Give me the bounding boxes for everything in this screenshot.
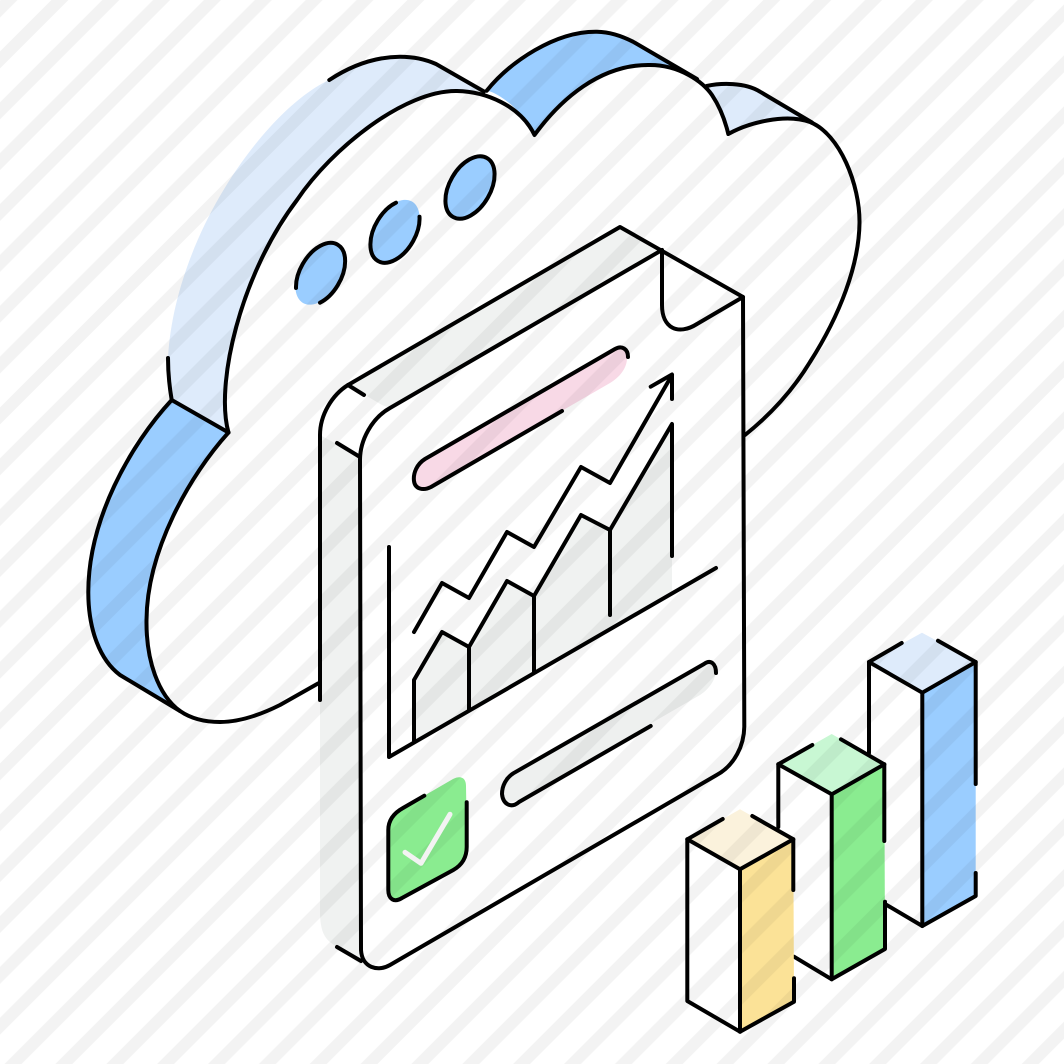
icon: green checkbox <box>388 777 467 900</box>
bar: green <box>778 734 885 979</box>
cloud: light blue side right <box>707 84 812 134</box>
cloud: light blue side <box>168 57 484 432</box>
cloud <box>88 32 860 722</box>
cloud: blue side top <box>487 32 697 135</box>
chart: gray bars fill <box>414 424 672 741</box>
bar: blue <box>869 633 976 926</box>
text bar: gray <box>502 660 716 805</box>
document: outline <box>320 227 744 968</box>
document: gray side faces <box>320 227 662 965</box>
icon: cloud dot 1 <box>285 234 355 313</box>
icon: white check mark <box>405 814 450 863</box>
chart <box>389 374 716 757</box>
document <box>320 227 744 968</box>
small bar chart <box>687 633 976 1032</box>
icon: cloud dot 3 <box>435 148 505 227</box>
cloud: blue side lower left <box>88 400 229 711</box>
title bar: pink <box>414 347 628 489</box>
icon: cloud dot 2 <box>360 191 430 271</box>
bar: yellow <box>687 809 794 1032</box>
chart: bars <box>414 424 672 741</box>
cloud: front outline <box>146 65 860 722</box>
chart: rising arrow <box>414 374 672 632</box>
document: folded corner <box>662 250 743 330</box>
chart: axes <box>389 547 716 757</box>
